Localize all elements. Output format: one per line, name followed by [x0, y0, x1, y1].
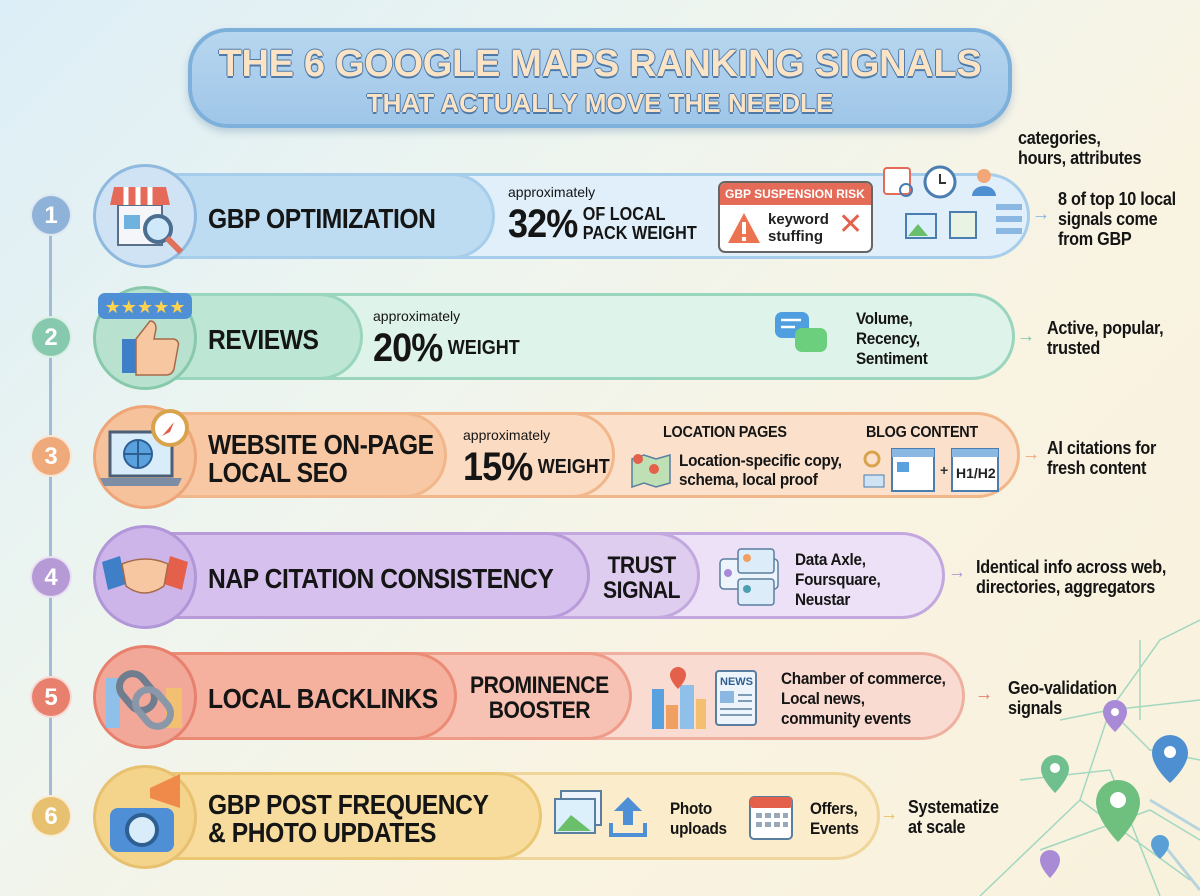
- stat 20%: approximately: [373, 308, 460, 324]
- stat 15%: approximately: [463, 427, 550, 443]
- number 6: 6: [44, 803, 58, 830]
- number 4: [30, 556, 72, 598]
- annotation: categories: [1018, 128, 1141, 168]
- result 1: 8 of top 10 local: [1058, 189, 1176, 209]
- timeline line: [49, 215, 52, 815]
- icon: directory cards: [719, 548, 779, 606]
- label: prominence booster: BOOSTER: [489, 697, 590, 724]
- result 5: signals: [1008, 698, 1062, 718]
- row 5: backlinks: Chamber of commerce,: [781, 669, 946, 688]
- row 1: GBP optimization: 32%: [508, 202, 577, 246]
- row 3: website: WEIGHT: [538, 456, 610, 478]
- number 3: 3: [44, 443, 58, 470]
- result 2: Active, popular,: [1047, 318, 1163, 338]
- arrow 6: →: [880, 803, 898, 825]
- panel: location pages: LOCATION PAGES: [663, 424, 787, 441]
- row 2: reviews: [95, 293, 1015, 380]
- result 5: [1008, 678, 1117, 718]
- row 2: reviews: Recency,: [856, 329, 920, 348]
- row 2: reviews: Volume,: [856, 309, 912, 328]
- icon: city and news: [652, 667, 757, 729]
- row 5: backlinks: Local news,: [781, 689, 865, 708]
- row 2: reviews: WEIGHT: [448, 336, 520, 358]
- callout: suspension risk: GBP SUSPENSION RISK: [725, 187, 865, 201]
- row 6: posts & photos: Offers,: [810, 799, 857, 818]
- row 4: NAP: NAP CITATION CONSISTENCY: [208, 563, 553, 594]
- label: trust signal: [603, 552, 680, 604]
- number 5: 5: [44, 684, 58, 711]
- result 6: at scale: [908, 817, 965, 837]
- number 1: [30, 194, 72, 236]
- panel: blog content: [864, 424, 999, 492]
- result 4: directories, aggregators: [976, 577, 1155, 597]
- number 3: [30, 435, 72, 477]
- label: prominence booster: [470, 672, 609, 724]
- icon: storefront: [93, 164, 197, 268]
- number 2: [30, 316, 72, 358]
- annotation: categories: hours, attributes: [1018, 148, 1141, 168]
- panel: blog content: H1/H2: [956, 465, 996, 481]
- row 2: reviews: REVIEWS: [208, 324, 319, 355]
- row 4: NAP: [95, 532, 945, 619]
- icon: chain link city: [93, 645, 197, 749]
- callout: suspension risk: keyword: [768, 211, 829, 228]
- row 1: GBP optimization: [95, 173, 1030, 259]
- result 1: [1058, 189, 1176, 249]
- background map network: [980, 620, 1200, 896]
- stat 32%: approximately: [508, 184, 595, 200]
- row 6: posts & photos: Photo: [670, 799, 712, 818]
- result 2: trusted: [1047, 338, 1100, 358]
- arrow 2: →: [1017, 325, 1035, 347]
- arrow 1: →: [1032, 203, 1050, 225]
- title: THAT ACTUALLY MOVE THE NEEDLE: [367, 88, 833, 118]
- row 6: posts & photos: & PHOTO UPDATES: [208, 817, 436, 848]
- icon: city and news: NEWS: [720, 676, 753, 688]
- panel: location pages: schema, local proof: [679, 470, 818, 489]
- icon: camera megaphone: [93, 765, 197, 869]
- icon: thumbs up: [93, 286, 197, 390]
- arrow 3: →: [1022, 443, 1040, 465]
- result 3: fresh content: [1047, 458, 1146, 478]
- result 1: signals come: [1058, 209, 1157, 229]
- result 4: Identical info across web,: [976, 557, 1166, 577]
- row 5: backlinks: [95, 652, 965, 740]
- row 3: website: [95, 412, 1020, 498]
- number 1: 1: [44, 202, 58, 229]
- result 3: AI citations for: [1047, 438, 1156, 458]
- row 6: posts & photos: GBP POST FREQUENCY: [208, 789, 489, 820]
- number 6: [30, 795, 72, 837]
- result 6: [908, 797, 999, 837]
- icon: chat bubbles: [775, 312, 827, 352]
- row 1: GBP optimization: OF LOCAL: [583, 204, 666, 224]
- row 5: backlinks: LOCAL BACKLINKS: [208, 683, 438, 714]
- icon: thumbs up: ★★★★★: [105, 297, 185, 318]
- icon: photos & upload: [554, 790, 647, 837]
- result 1: from GBP: [1058, 229, 1131, 249]
- title: THE 6 GOOGLE MAPS RANKING SIGNALS: [219, 43, 981, 85]
- result 5: Geo-validation: [1008, 678, 1117, 698]
- row 1: GBP optimization: PACK WEIGHT: [583, 223, 697, 243]
- arrow 4: →: [948, 561, 966, 583]
- row 2: reviews: 20%: [373, 326, 442, 370]
- icon: laptop globe: [93, 405, 197, 509]
- icon: calendar: [749, 796, 793, 840]
- panel: location pages: Location-specific copy,: [679, 451, 842, 470]
- result 4: [976, 557, 1166, 597]
- row 2: reviews: Sentiment: [856, 349, 928, 368]
- row 6: posts & photos: [95, 772, 880, 860]
- row 1: GBP optimization: GBP OPTIMIZATION: [208, 203, 436, 234]
- row 6: posts & photos: uploads: [670, 819, 727, 838]
- row 5: backlinks: community events: [781, 709, 911, 728]
- row 4: NAP: Data Axle,: [795, 550, 866, 569]
- panel: blog content: BLOG CONTENT: [866, 424, 978, 441]
- title: [188, 28, 1012, 128]
- callout: suspension risk: ✕: [838, 208, 863, 241]
- label: trust signal: SIGNAL: [603, 577, 680, 604]
- label: trust signal: TRUST: [607, 552, 676, 579]
- annotation: categories: categories,: [1018, 128, 1101, 148]
- number 4: 4: [44, 564, 58, 591]
- row 3: website: WEBSITE ON-PAGE: [208, 429, 434, 460]
- panel: location pages: [631, 424, 842, 489]
- row 4: NAP: Foursquare,: [795, 570, 880, 589]
- callout: suspension risk: [718, 181, 873, 253]
- icon: handshake: [93, 525, 197, 629]
- result 2: [1047, 318, 1163, 358]
- number 2: 2: [44, 324, 58, 351]
- row 3: website: 15%: [463, 445, 532, 489]
- row 4: NAP: Neustar: [795, 590, 850, 609]
- result 6: Systematize: [908, 797, 999, 817]
- number 5: [30, 676, 72, 718]
- row 6: posts & photos: Events: [810, 819, 859, 838]
- arrow 5: →: [975, 683, 993, 705]
- icons: GBP profile elements: [883, 166, 1022, 239]
- result 3: [1047, 438, 1156, 478]
- label: prominence booster: PROMINENCE: [470, 672, 609, 699]
- map pins: [1040, 700, 1188, 878]
- row 3: website: LOCAL SEO: [208, 457, 347, 488]
- panel: blog content: +: [940, 462, 948, 478]
- callout: suspension risk: stuffing: [768, 228, 823, 245]
